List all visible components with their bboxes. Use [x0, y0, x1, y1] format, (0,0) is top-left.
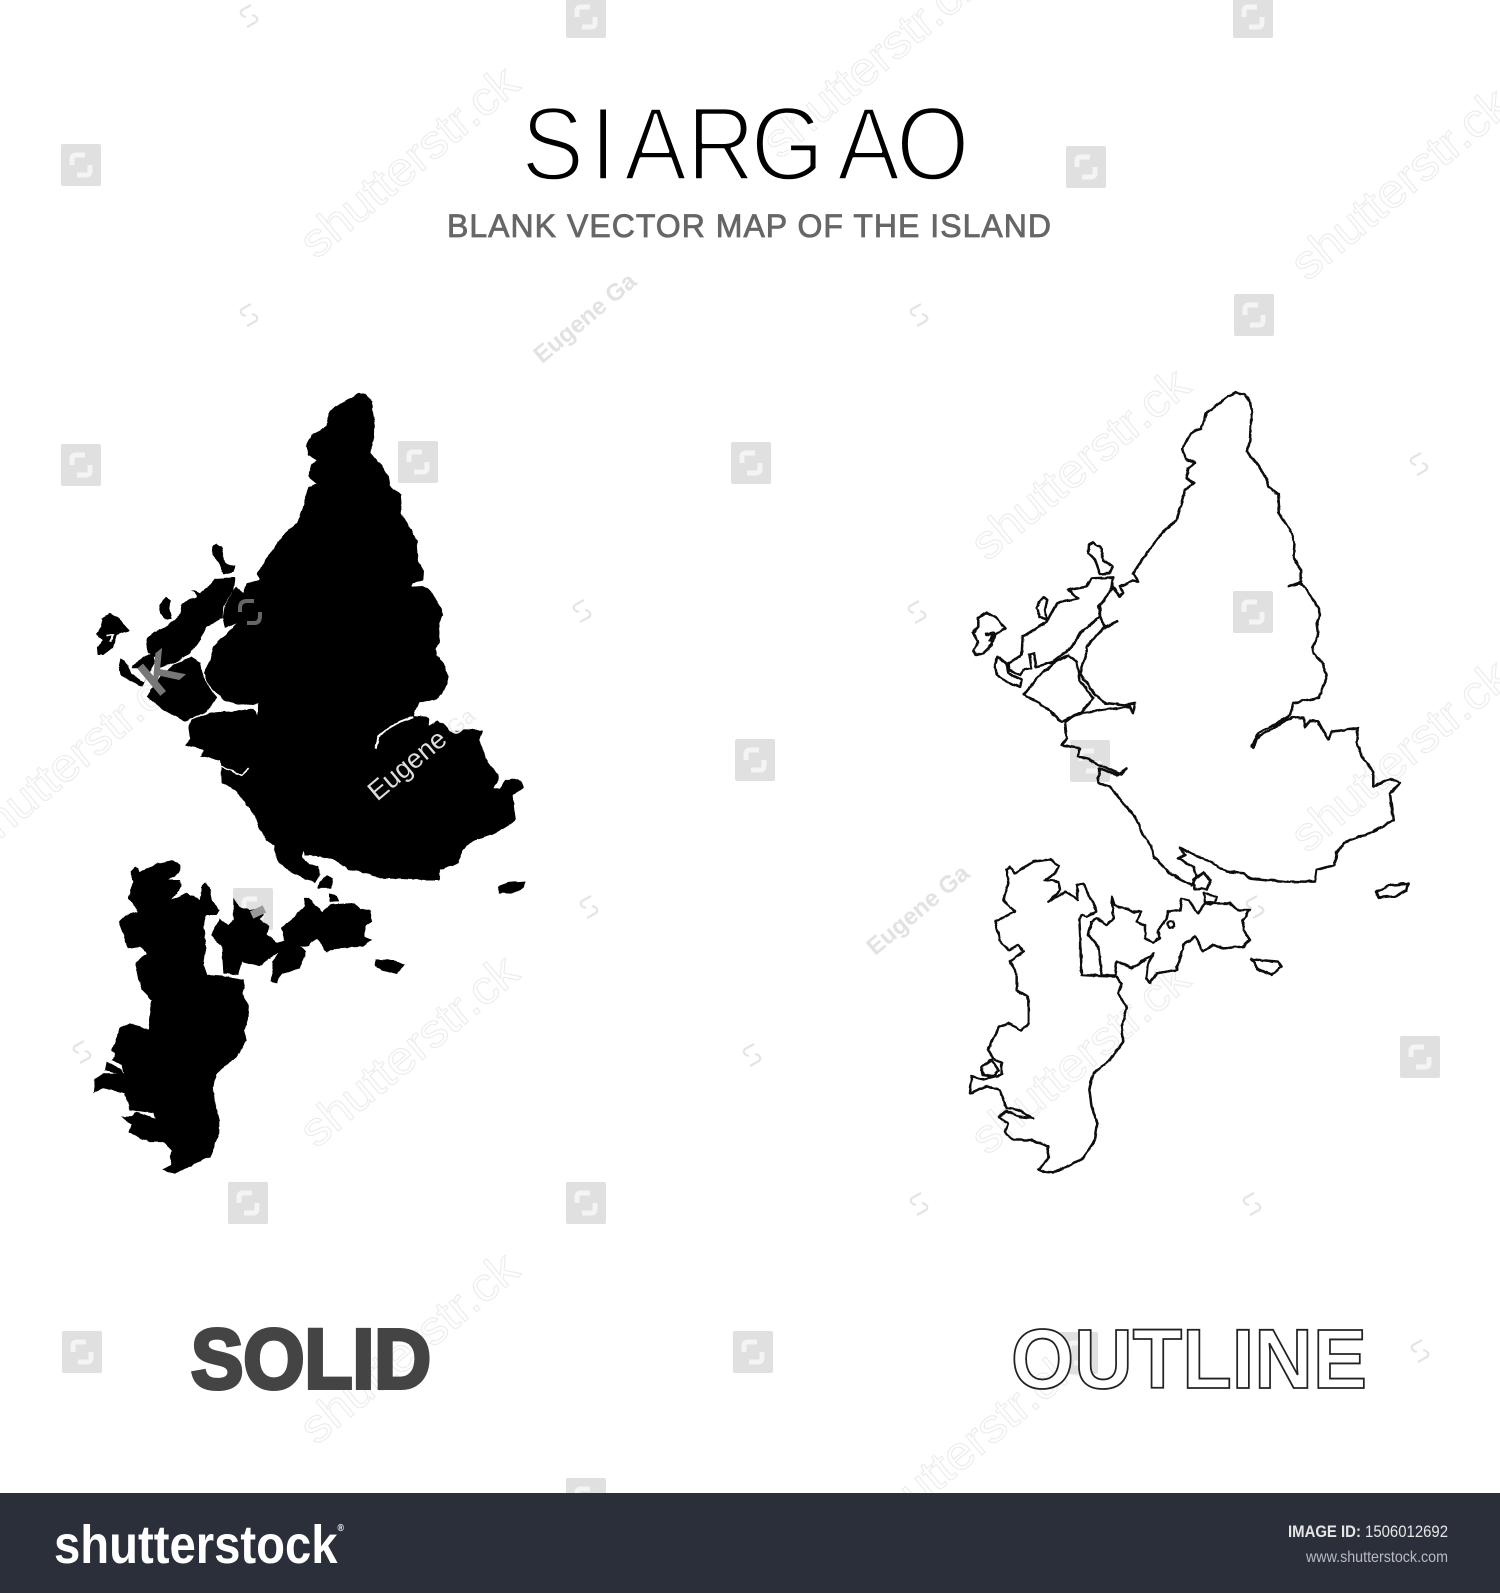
- footer bar: [0, 1493, 1500, 1593]
- watermark layer: shutterstr.ck: [848, 1339, 1087, 1552]
- watermark layer: shutterstr.ck: [289, 55, 528, 268]
- label: solid: SOLID: [191, 1312, 431, 1406]
- subtitle: BLANK VECTOR MAP OF THE ISLAND: [447, 208, 1051, 244]
- watermark over solid map: [128, 601, 481, 919]
- outline map: northern islands: [973, 393, 1400, 889]
- watermark over solid map: Eugene Ga: [362, 699, 481, 806]
- watermark over solid map: K: [128, 638, 194, 707]
- watermark layer: shutterstr.ck: [960, 357, 1199, 570]
- solid map: northern islands: [96, 393, 524, 883]
- watermark layer: shutterstr.ck: [960, 951, 1199, 1164]
- footer logo: shutterstock: [54, 1515, 378, 1575]
- watermark layer: Eugene Ga: [861, 859, 975, 961]
- outline map: southern islands: [970, 859, 1408, 1173]
- title: SIARGAO: [521, 86, 969, 203]
- image id: IMAGE ID: 1506012692: [1288, 1522, 1448, 1541]
- solid map: southern islands: [93, 850, 525, 1173]
- solid map: [93, 393, 525, 1173]
- watermark layer: shutterstr.ck: [289, 1241, 528, 1454]
- footer logo: ®: [338, 1523, 345, 1534]
- website: www.shutterstock.com: [1305, 1549, 1448, 1566]
- watermark layer: Eugene Ga: [528, 267, 642, 369]
- watermark layer: shutterstr.ck: [289, 944, 528, 1157]
- outline map: [970, 393, 1408, 1173]
- label: outline: OUTLINE: [1011, 1312, 1367, 1406]
